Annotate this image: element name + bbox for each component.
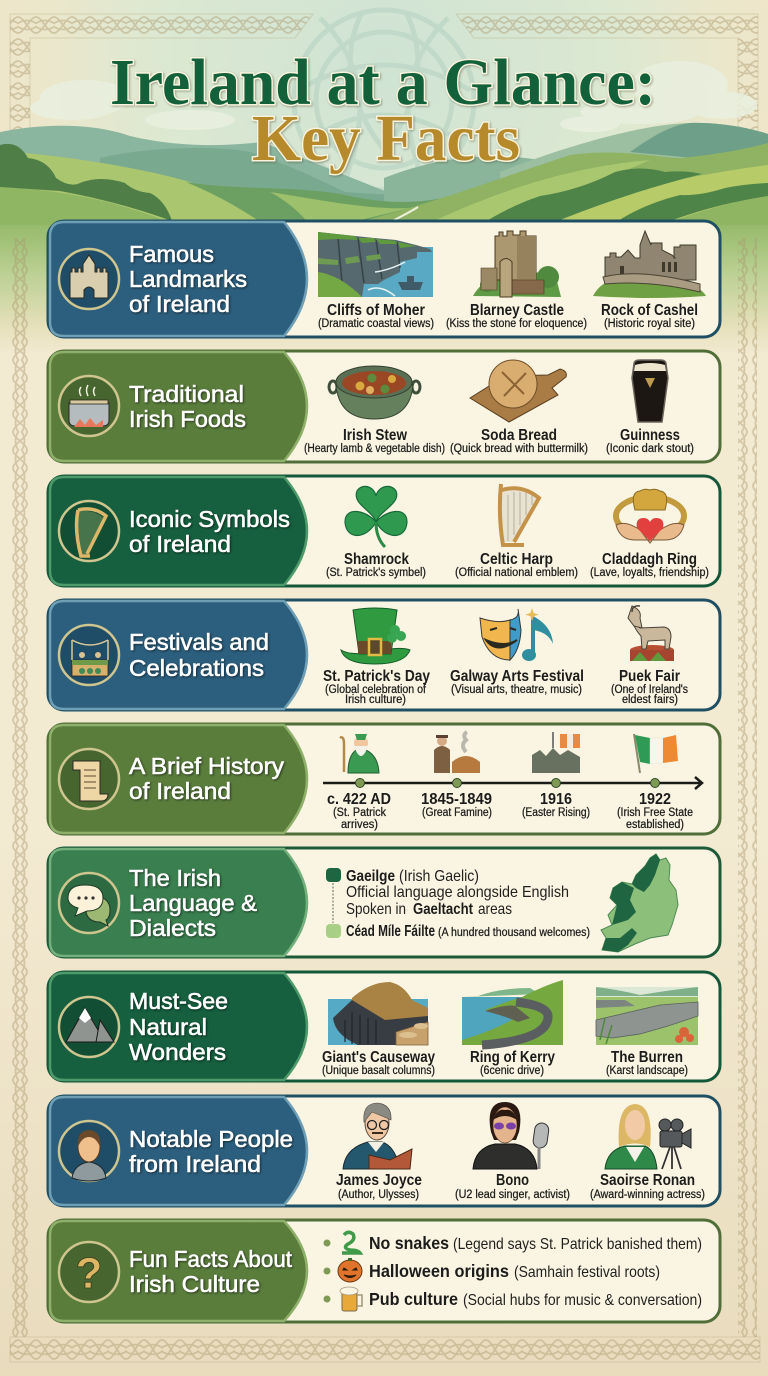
caption: (Author, Ulysses) [338,1189,419,1201]
heading: from Ireland [129,1151,261,1177]
label: Guinness [620,427,680,444]
legend [326,868,590,940]
heading: Famous [129,241,214,267]
heading [129,241,247,317]
timeline [323,777,702,789]
caption: (Hearty lamb & vegetable dish) [304,443,445,455]
icon: speech bubbles [59,873,119,933]
label: Galway Arts Festival [450,668,584,685]
panel: festivals [48,600,720,710]
panel: landmarks [48,221,720,337]
panel: symbols [48,476,720,586]
event: 1922: established) [626,819,684,831]
heading [129,753,285,804]
caption: (Visual arts, theatre, music) [451,684,582,696]
fact: pub culture: Pub culture [369,1289,458,1309]
heading: of Ireland [129,291,230,317]
heading: Irish Foods [129,406,246,432]
heading: Language & [129,890,257,916]
caption: (Iconic dark stout) [606,443,694,455]
heading: of Ireland [129,531,231,557]
heading [129,506,290,557]
label: James Joyce [336,1172,422,1189]
icon: scroll [59,749,119,809]
event: 1845-1849: (Great Famine) [422,807,492,819]
heading: Festivals and [129,629,269,655]
item: Celtic Harp [455,484,578,579]
icon: harp [59,501,119,561]
caption: (Historic royal site) [604,318,695,330]
label: Giant's Causeway [322,1049,435,1066]
caption: (Kiss the stone for eloquence) [446,318,587,330]
heading: The Irish [129,865,221,891]
panel: history [48,724,720,834]
item: Galway Arts Festival [450,608,584,696]
event: 1845-1849 [421,791,492,819]
item: Puck Fair [611,606,688,706]
event: c. 422 AD: c. 422 AD [327,791,391,808]
label: Rock of Cashel [601,302,698,319]
icon: famine figure [434,732,480,773]
label: Irish Stew [343,427,408,444]
heading: of Ireland [129,778,231,804]
title [110,46,656,175]
item: St. Patrick's Day [323,608,430,706]
caption: (One of Ireland's [611,684,688,696]
label: Soda Bread [481,427,557,444]
heading: Iconic Symbols [129,506,290,532]
icon: cooking pot [59,376,119,436]
panel: fun facts [48,1220,720,1322]
heading [129,381,246,432]
label: Ring of Kerry [470,1049,555,1066]
heading [129,629,269,681]
fact: no snakes: No snakes [369,1233,449,1253]
icon: mountains [59,997,119,1057]
item: Saoirse Ronan [590,1104,705,1201]
icon: St. Patrick [340,734,379,773]
title line 2: Key Facts [252,102,520,175]
heading: Notable People [129,1126,293,1152]
item: The Burren [596,987,698,1077]
label: Cliffs of Moher [327,302,425,319]
heading [129,865,257,941]
label: Puek Fair [619,668,680,685]
panel: foods [48,351,720,462]
caption: (6cenic drive) [480,1065,544,1077]
fact: Halloween: Halloween origins [369,1261,509,1281]
event: 1916 [522,791,590,819]
heading: Traditional [129,381,244,407]
icon: person [59,1121,119,1181]
Celtic medallion [294,10,474,190]
label: Shamrock [344,551,409,568]
caption: (Quick bread with buttermilk) [450,443,588,455]
item: Ring of Kerry [462,980,563,1077]
icon: question mark [59,1242,119,1302]
item: Irish Stew [304,366,445,455]
panel: people [48,1096,720,1206]
label: The Burren [611,1049,683,1066]
item: Soda Bread [450,360,588,455]
caption: (Unique basalt columns) [322,1065,435,1077]
heading: Celebrations [129,655,264,681]
heading: Must-See [129,988,228,1014]
event: c. 422 AD [327,791,391,831]
event: 1845-1849: 1845-1849 [421,791,492,808]
fact: Halloween: (Samhain festival roots) [514,1264,660,1281]
label: Claddagh Ring [602,551,697,568]
fact: no snakes [324,1232,702,1253]
item: St. Patrick's Day: Irish culture) [345,694,406,706]
legend: Official language alongside English [346,884,569,901]
heading: Irish Culture [129,1271,260,1297]
icon: castle [59,249,119,309]
fact: no snakes: (Legend says St. Patrick banished them) [453,1236,702,1253]
fact: Halloween [324,1258,660,1282]
legend: (Irish Gaelic) [399,868,479,885]
heading [129,988,228,1065]
fact: pub culture: (Social hubs for music & conversation) [463,1292,702,1309]
label: Saoirse Ronan [600,1172,695,1189]
green field fade [0,222,768,353]
sky [0,0,768,222]
heading: Natural [129,1014,207,1040]
item: Blarney Castle [446,231,587,330]
label: Celtic Harp [480,551,553,568]
legend: Gaeilge [346,868,395,885]
legend: areas [478,901,512,918]
event: 1922 [617,791,693,831]
map of Ireland [601,854,678,952]
caption: (Global celebration of [325,684,427,696]
heading: Fun Facts About [129,1246,293,1272]
item: Cliffs of Moher [318,232,434,330]
item: Giant's Causeway [322,982,435,1077]
heading [129,1126,293,1177]
heading: Wonders [129,1039,226,1065]
icon: question mark: ? [76,1249,102,1298]
caption: (Official national emblem) [455,567,578,579]
legend: (A hundred thousand welcomes) [438,927,590,939]
item: Guinness [606,360,694,455]
label: Bono [496,1172,529,1189]
legend: Spoken in [346,901,406,918]
event: c. 422 AD: (St. Patrick [333,807,386,819]
event: 1922: 1922 [639,791,671,808]
item: Puck Fair: eldest fairs) [622,694,678,706]
caption: (Karst landscape) [606,1065,688,1077]
label: St. Patrick's Day [323,668,430,685]
legend: Céad Míle Fáilte [346,923,435,940]
icon: festival stall [59,625,119,685]
caption: (St. Patrick's symbel) [326,567,426,579]
fact: pub culture [324,1287,702,1311]
caption: (Award-winning actress) [590,1189,705,1201]
panel: natural wonders [48,972,720,1081]
rolling hills landscape [0,123,768,225]
caption: (U2 lead singer, activist) [455,1189,570,1201]
heading: A Brief History [129,753,285,779]
clouds [30,61,757,132]
caption: (Dramatic coastal views) [318,318,434,330]
item: Shamrock [326,486,426,579]
item: Claddagh Ring [590,489,709,579]
caption: (Lave, loyalts, friendship) [590,567,709,579]
event: 1922: (Irish Free State [617,807,693,819]
title line 1: Ireland at a Glance: [110,46,656,119]
item: James Joyce [336,1103,422,1201]
icon: Easter Rising [532,732,580,773]
label: Blarney Castle [470,302,564,319]
legend: Gaeltacht [413,901,474,918]
item: Rock of Cashel [593,231,706,330]
event: c. 422 AD: arrives) [341,819,378,831]
item: Bono [455,1102,570,1201]
event: 1916: (Easter Rising) [522,807,590,819]
heading: Dialects [129,915,216,941]
heading [129,1246,293,1297]
icon: Irish flag [634,734,678,773]
panel: language [48,848,720,957]
heading: Landmarks [129,266,247,292]
event: 1916: 1916 [540,791,572,808]
